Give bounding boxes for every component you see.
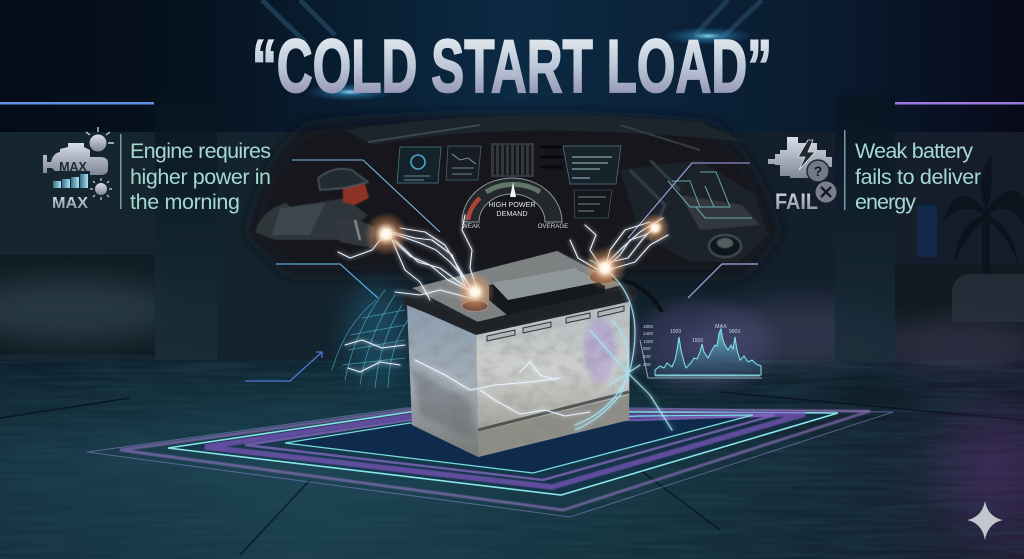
pillar right (835, 95, 895, 363)
battery cable (612, 278, 662, 312)
data chart: MAX (715, 324, 727, 330)
icon: starter motor fail: FAIL (775, 189, 818, 214)
data chart: 900 (643, 346, 651, 351)
battery lid (404, 250, 637, 335)
callout: battery fail (768, 130, 981, 214)
holographic floor platform (87, 405, 893, 517)
battery front face (476, 298, 630, 457)
HUD panels (397, 146, 621, 218)
positive terminal (462, 300, 488, 312)
icon: starter motor fail (768, 137, 836, 214)
battery text: fails to deliver (855, 165, 981, 189)
pointer arrow lower left (245, 352, 322, 381)
negative terminal (590, 271, 616, 283)
pointer line upper left (292, 160, 440, 232)
chart haze (620, 293, 784, 397)
data chart: 1200 (643, 339, 654, 344)
engine cover (491, 143, 563, 177)
power demand gauge: OVERAGE (538, 223, 568, 230)
power demand gauge (462, 178, 568, 230)
engine text: the morning (130, 190, 240, 214)
title flare right (663, 27, 753, 45)
pointer line upper right (628, 163, 750, 238)
data chart (640, 324, 762, 378)
spark: right cable (640, 213, 670, 243)
icon: engine max: MAX (52, 195, 89, 212)
icon: engine max (43, 127, 114, 212)
HUD panel: data (574, 190, 612, 218)
pillar left (155, 95, 217, 360)
data chart: 200 (643, 362, 651, 367)
icon: sparkle watermark (967, 501, 1003, 540)
gauge scale labels: WEAK (462, 223, 481, 230)
HUD panel: trend (446, 146, 481, 180)
top accent line left (0, 102, 154, 104)
spark: left cable (364, 212, 408, 256)
battery left face (407, 305, 478, 457)
HUD panel: dial (397, 147, 441, 183)
data chart: 1800 (643, 324, 654, 329)
data chart: 1000 (670, 329, 681, 335)
spark: right terminal (583, 246, 627, 290)
title: “COLD START LOAD” (252, 24, 772, 108)
lid vents (487, 306, 624, 341)
title flare left (305, 83, 395, 101)
engine bay (248, 115, 778, 275)
battery text: Weak battery (855, 139, 973, 163)
holographic wire mesh left (332, 285, 408, 388)
data chart: 400 (643, 354, 651, 359)
engine text: higher power in (130, 165, 271, 189)
raised lid module (489, 269, 605, 315)
pointer arrow mid left (276, 264, 378, 298)
gauge needle (510, 182, 516, 197)
data chart: 1500 (692, 338, 703, 344)
gauge label: HIGH POWER (488, 200, 536, 209)
lightning arcs (338, 215, 672, 430)
parked car (952, 274, 1024, 322)
data chart: 1400 (643, 331, 654, 336)
icon: starter motor fail: ? (814, 163, 822, 179)
top accent line right (895, 102, 1024, 104)
battery (400, 250, 662, 465)
icon: engine max: MAX (59, 160, 88, 174)
power demand gauge: DEMAND (496, 209, 528, 218)
palm tree silhouette (942, 155, 1024, 275)
engine text: Engine requires (130, 139, 271, 163)
callout: engine (43, 127, 271, 214)
battery text: energy (855, 190, 916, 214)
data chart: 900X (729, 329, 741, 335)
pointer arrow mid right (688, 264, 758, 298)
spark: left terminal (455, 272, 495, 312)
HUD panel: readout (563, 146, 621, 184)
